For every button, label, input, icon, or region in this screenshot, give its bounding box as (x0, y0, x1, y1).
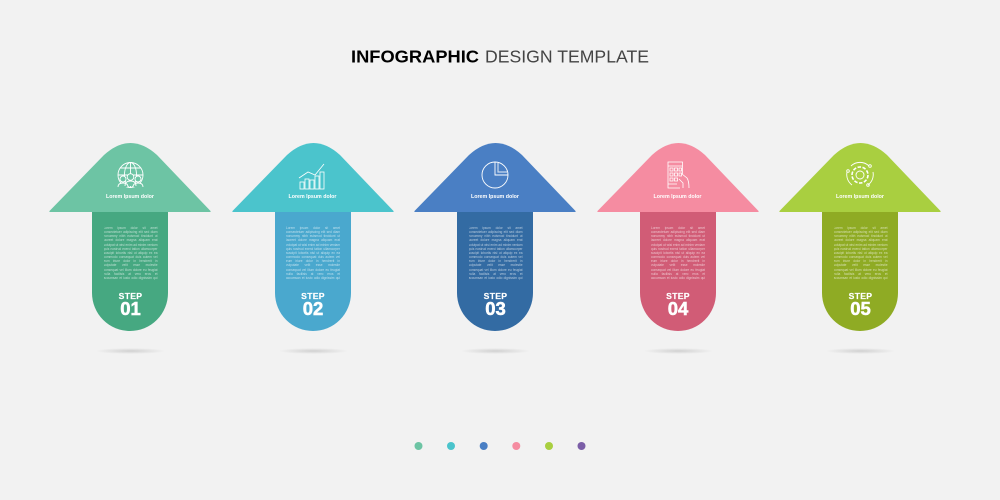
panel: step 03: 03 (485, 298, 506, 318)
panel: step 05: 05 (850, 298, 871, 318)
panel: step 01 (49, 143, 211, 353)
panel: step 01: STEP (119, 291, 142, 301)
panel: step 03 (414, 143, 576, 353)
legend dots (414, 442, 586, 450)
panel: step 04: 04 (668, 298, 688, 318)
panel: step 02: 02 (303, 298, 323, 318)
panel: step 04: Lorem Ipsum dolor (654, 194, 701, 200)
panel: step 04: STEP (666, 291, 690, 301)
title: DESIGN TEMPLATE (485, 46, 649, 66)
panel: step 02: STEP (301, 291, 325, 301)
panel: step 03: Lorem Ipsum dolor (471, 194, 519, 200)
panel: step 01: Lorem Ipsum dolor (106, 194, 154, 200)
panel: step 04 (597, 143, 759, 353)
panel: step 05: Lorem Ipsum dolor (836, 194, 884, 200)
panel: step 05 (779, 143, 941, 353)
panel: step 01: 01 (120, 298, 141, 318)
panel: step 02 (232, 143, 394, 353)
title: INFOGRAPHIC (351, 46, 479, 66)
panel: step 03: STEP (484, 291, 507, 301)
title (351, 46, 649, 66)
panel: step 02: Lorem Ipsum dolor (288, 194, 336, 200)
panel: step 05: STEP (849, 291, 872, 301)
